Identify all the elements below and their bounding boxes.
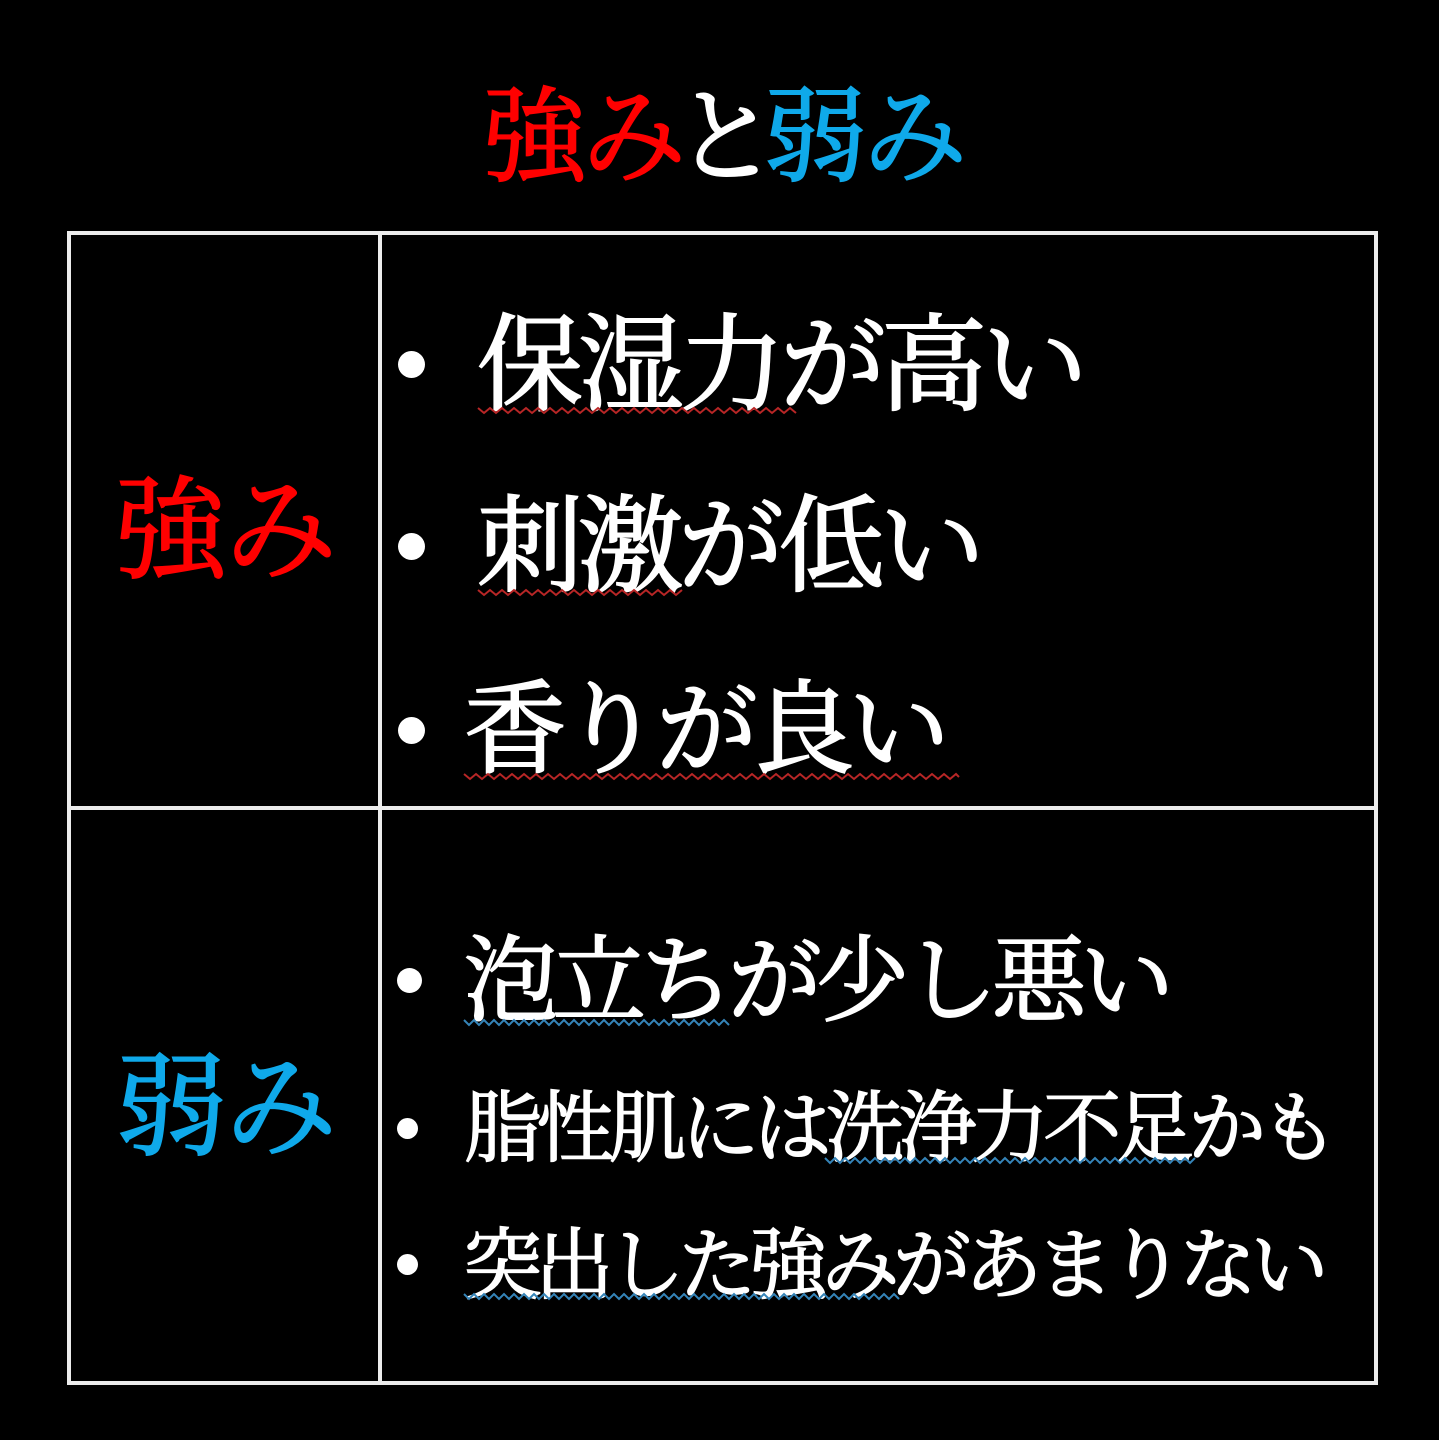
table xyxy=(67,231,1378,1385)
weakness item 3: 突出した強みがあまりない xyxy=(464,1222,1322,1309)
weakness item 2: 脂性肌には洗浄力不足かも xyxy=(464,1085,1333,1172)
strength item 3: 香りが良い xyxy=(464,675,944,788)
label: weaknesses: 弱み xyxy=(115,1047,335,1171)
strength item 2: 刺激が低い xyxy=(477,489,980,606)
label: strengths: 強み xyxy=(115,470,335,594)
weakness item 1: 泡立ちが少し悪い xyxy=(464,930,1168,1034)
strength item 1: 保湿力が高い xyxy=(477,308,1083,425)
title: 強みと弱み xyxy=(483,81,967,196)
